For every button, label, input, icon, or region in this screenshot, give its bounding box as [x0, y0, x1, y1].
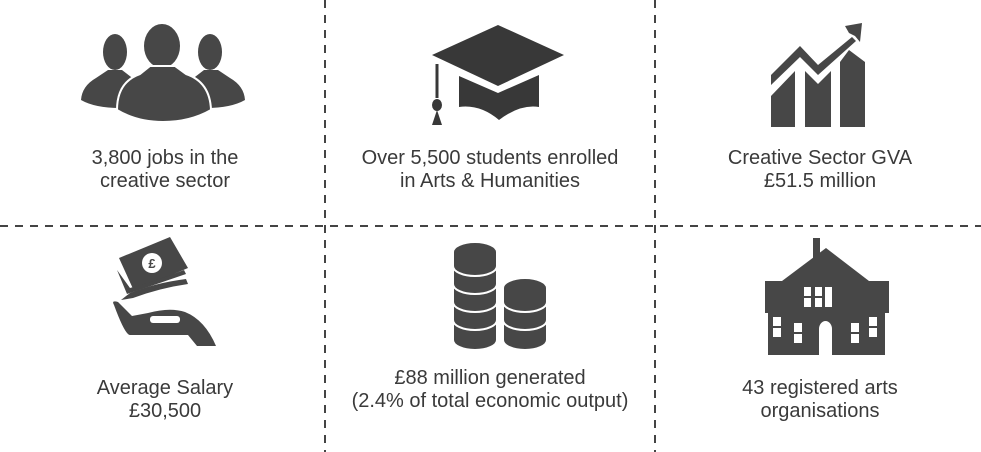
text: salary — [96, 377, 233, 422]
icon: money in hand: £ — [148, 256, 156, 271]
text: organisations — [742, 377, 898, 422]
text: jobs: 3,800 jobs in the — [92, 147, 238, 169]
text: organisations: organisations — [761, 400, 879, 422]
text: salary: £30,500 — [129, 400, 201, 422]
icon: coins — [453, 242, 547, 350]
text: salary: Average Salary — [97, 377, 233, 399]
text: GVA: £51.5 million — [764, 170, 876, 192]
icon: graduation cap — [432, 25, 564, 125]
icon: money in hand — [113, 237, 216, 346]
text: jobs: creative sector — [100, 170, 230, 192]
text: GVA: Creative Sector GVA — [728, 147, 912, 169]
text: organisations: 43 registered arts — [742, 377, 898, 399]
text: students: in Arts & Humanities — [400, 170, 580, 192]
text: jobs — [92, 147, 238, 192]
text: students: Over 5,500 students enrolled — [362, 147, 618, 169]
text: generated: (2.4% of total economic output) — [352, 390, 628, 412]
icon: people — [81, 24, 245, 122]
text: generated: £88 million generated — [394, 367, 586, 389]
icon: house — [765, 238, 889, 355]
text: GVA — [728, 147, 912, 192]
text: students — [362, 147, 618, 192]
text: generated — [352, 367, 628, 412]
icon: growth chart — [771, 23, 865, 127]
